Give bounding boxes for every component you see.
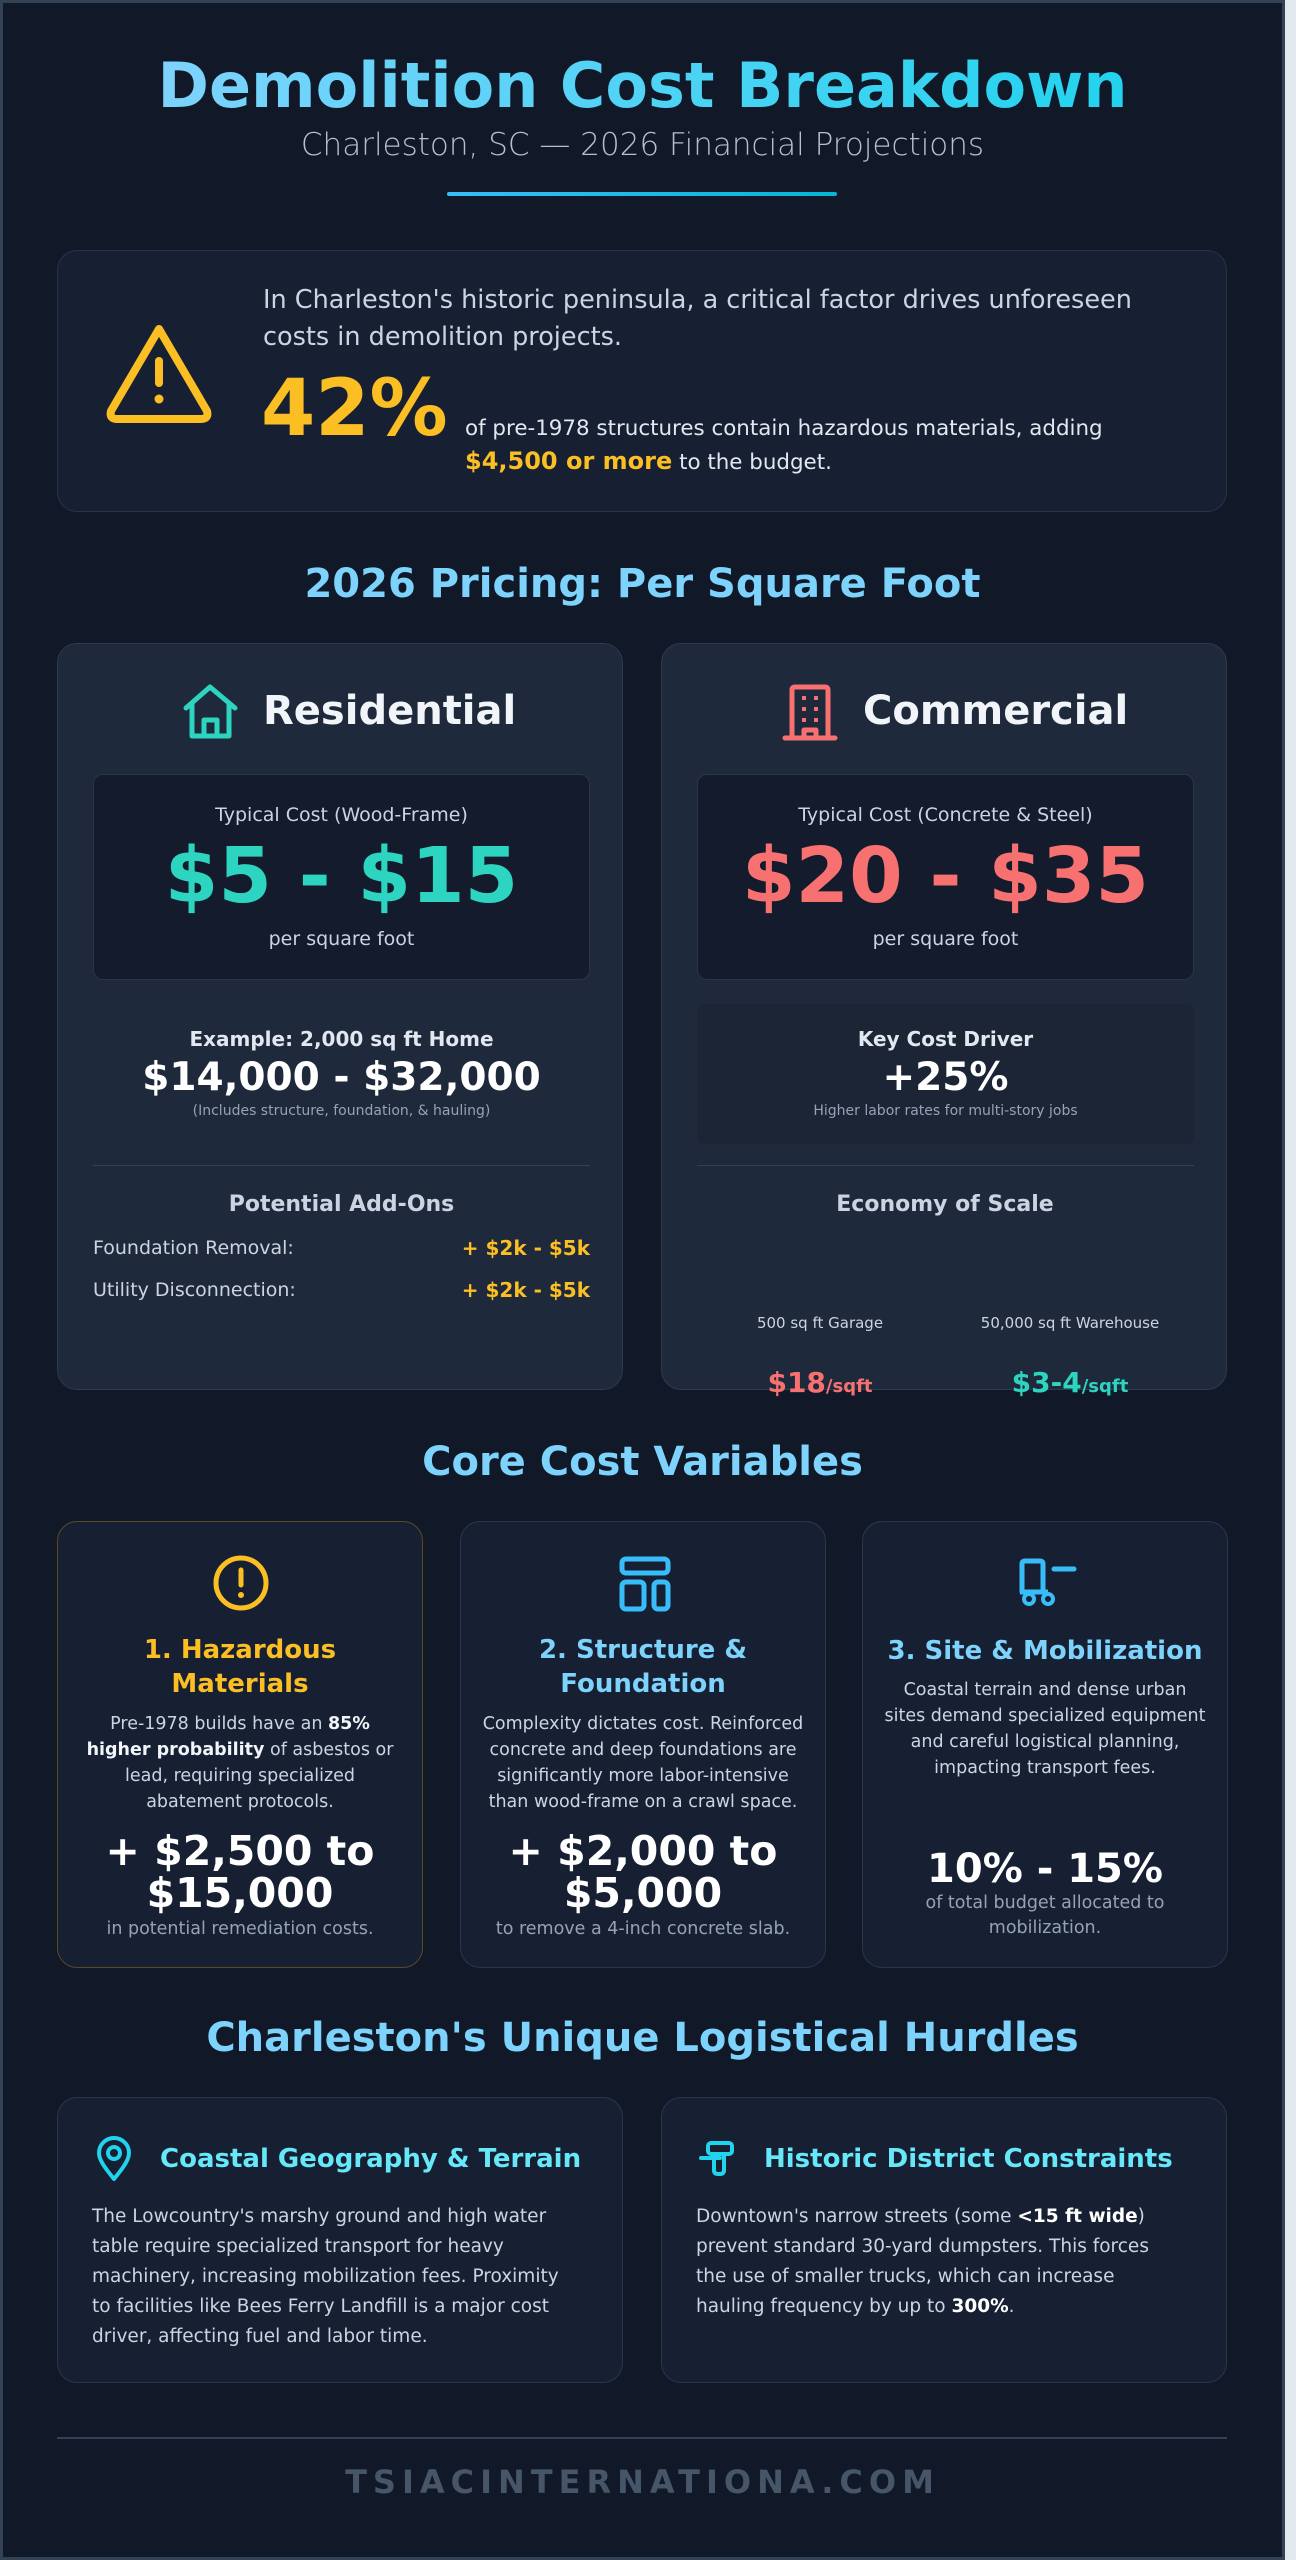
panel: structure & foundation: concrete and deep foundations are <box>490 1740 796 1760</box>
panel: historic district: prevent standard 30-yard dumpsters. This forces <box>696 2236 1149 2257</box>
economy of scale: 500 sq ft Garage <box>757 1314 883 1332</box>
heading: pricing: 2026 Pricing: Per Square Foot <box>304 561 981 607</box>
panel: structure & foundation <box>460 1521 826 1968</box>
panel: structure & foundation: than wood-frame on a crawl space. <box>489 1792 797 1812</box>
panel: structure & foundation: 2. Structure & <box>539 1635 747 1665</box>
stat text: of pre-1978 structures contain hazardous materials, adding <box>465 416 1103 441</box>
heading: core variables: Core Cost Variables <box>422 1439 863 1485</box>
panel: hazardous materials: abatement protocols. <box>146 1792 334 1812</box>
footer: TSIACINTERNATIONA.COM <box>345 2463 940 2501</box>
intro text: In Charleston's historic peninsula, a critical factor drives unforeseen <box>263 285 1132 315</box>
panel: site & mobilization: sites demand specialized equipment <box>885 1706 1205 1726</box>
panel: hazardous materials: lead, requiring specialized <box>125 1766 355 1786</box>
price box: per square foot <box>269 928 414 950</box>
title underline <box>447 192 837 196</box>
panel: site & mobilization: 3. Site & Mobilization <box>888 1636 1202 1666</box>
economy of scale <box>757 1192 1159 1399</box>
panel: coastal geography <box>57 2097 623 2383</box>
title: Demolition Cost Breakdown <box>158 49 1128 122</box>
panel: hazardous materials: Pre-1978 builds have an 85% <box>110 1714 370 1734</box>
stat text: $4,500 or more to the budget. <box>465 447 832 475</box>
icon: house <box>184 684 238 738</box>
panel: site & mobilization: Coastal terrain and dense urban <box>904 1680 1186 1700</box>
panel: structure & foundation: significantly more labor-intensive <box>497 1766 789 1786</box>
panel: historic district: hauling frequency by up to 300%. <box>696 2296 1015 2317</box>
panel: coastal geography: to facilities like Bees Ferry Landfill is a major cost <box>92 2296 549 2317</box>
icon: alert circle <box>214 1556 268 1610</box>
panel: structure & foundation: + $2,000 to <box>509 1827 777 1875</box>
panel: structure & foundation: to remove a 4-inch concrete slab. <box>496 1919 790 1939</box>
panel: structure & foundation: Complexity dictates cost. Reinforced <box>483 1714 803 1734</box>
example block: (Includes structure, foundation, & hauling) <box>193 1103 490 1119</box>
icon: layout blocks <box>620 1556 670 1612</box>
price box: $20 - $35 <box>742 832 1149 921</box>
price box <box>697 774 1194 980</box>
intro text <box>263 285 1132 352</box>
example block <box>142 1027 541 1119</box>
panel: hazardous materials: in potential remediation costs. <box>106 1919 374 1939</box>
example block: $14,000 - $32,000 <box>142 1055 541 1100</box>
key cost driver block: Higher labor rates for multi-story jobs <box>813 1103 1078 1119</box>
panel: historic district: Historic District Constraints <box>764 2144 1173 2174</box>
panel: hazardous materials: Materials <box>171 1669 309 1699</box>
panel: hazardous materials <box>57 1521 423 1968</box>
panel: site & mobilization: impacting transport fees. <box>934 1758 1156 1778</box>
panel: site & mobilization <box>862 1521 1228 1968</box>
add-ons list: Potential Add-Ons <box>229 1192 454 1217</box>
example block: Example: 2,000 sq ft Home <box>189 1027 494 1051</box>
price box <box>93 774 590 980</box>
panel: structure & foundation: $5,000 <box>564 1869 722 1917</box>
card header: Residential <box>263 688 516 734</box>
key cost driver block: Key Cost Driver <box>858 1027 1033 1051</box>
key cost driver block <box>697 1004 1194 1144</box>
panel: site & mobilization: 10% - 15% <box>927 1846 1163 1892</box>
panel: historic district: Downtown's narrow streets (some <15 ft wide) <box>696 2206 1145 2227</box>
stat 42%: 42% <box>261 364 448 454</box>
panel: hazardous materials: higher probability of asbestos or <box>87 1740 393 1760</box>
icon: warning triangle <box>106 325 212 423</box>
panel: hazardous materials: $15,000 <box>147 1869 333 1917</box>
intro text: costs in demolition projects. <box>263 322 622 352</box>
economy of scale: $18/sqft <box>767 1366 873 1399</box>
add-ons list: + $2k - $5k <box>462 1278 590 1302</box>
card header <box>782 684 1128 740</box>
price box: per square foot <box>873 928 1018 950</box>
add-ons list: Utility Disconnection: <box>93 1279 296 1301</box>
stat text <box>465 416 1103 475</box>
economy of scale: 50,000 sq ft Warehouse <box>981 1314 1159 1332</box>
economy of scale: Economy of Scale <box>836 1192 1054 1217</box>
panel: site & mobilization: mobilization. <box>989 1918 1101 1938</box>
panel: site & mobilization: of total budget allocated to <box>926 1893 1164 1913</box>
panel: historic district <box>661 2097 1227 2383</box>
icon: map pin <box>97 2136 131 2182</box>
add-ons list: + $2k - $5k <box>462 1236 590 1260</box>
subtitle: Charleston, SC — 2026 Financial Projections <box>301 127 984 163</box>
panel: coastal geography: driver, affecting fuel and labor time. <box>92 2326 428 2347</box>
economy of scale: $3-4/sqft <box>1012 1366 1128 1399</box>
panel: alert <box>57 250 1227 512</box>
panel: coastal geography: The Lowcountry's marshy ground and high water <box>92 2206 546 2227</box>
card header: Commercial <box>863 688 1128 734</box>
panel: site & mobilization: and careful logistical planning, <box>911 1732 1179 1752</box>
panel: historic district: the use of smaller trucks, which can increase <box>696 2266 1114 2287</box>
icon: building <box>782 684 838 740</box>
panel: coastal geography: machinery, increasing mobilization fees. Proximity <box>92 2266 559 2287</box>
card header <box>184 684 516 738</box>
panel: coastal geography: Coastal Geography & Terrain <box>160 2144 581 2174</box>
panel: hazardous materials: + $2,500 to <box>106 1827 374 1875</box>
panel: commercial <box>661 643 1227 1390</box>
panel: structure & foundation: Foundation <box>560 1669 726 1699</box>
panel: hazardous materials: 1. Hazardous <box>144 1635 336 1665</box>
add-ons list: Foundation Removal: <box>93 1237 294 1259</box>
panel: coastal geography: table require specialized transport for heavy <box>92 2236 504 2257</box>
icon: truck <box>1020 1558 1076 1606</box>
price box: Typical Cost (Concrete & Steel) <box>798 804 1093 826</box>
panel: residential <box>57 643 623 1390</box>
key cost driver block: +25% <box>882 1055 1009 1100</box>
icon: paint roller <box>699 2141 734 2176</box>
add-ons list <box>93 1192 590 1302</box>
price box: $5 - $15 <box>165 832 518 921</box>
heading: logistical hurdles: Charleston's Unique Logistical Hurdles <box>206 2015 1079 2061</box>
price box: Typical Cost (Wood-Frame) <box>215 804 468 826</box>
